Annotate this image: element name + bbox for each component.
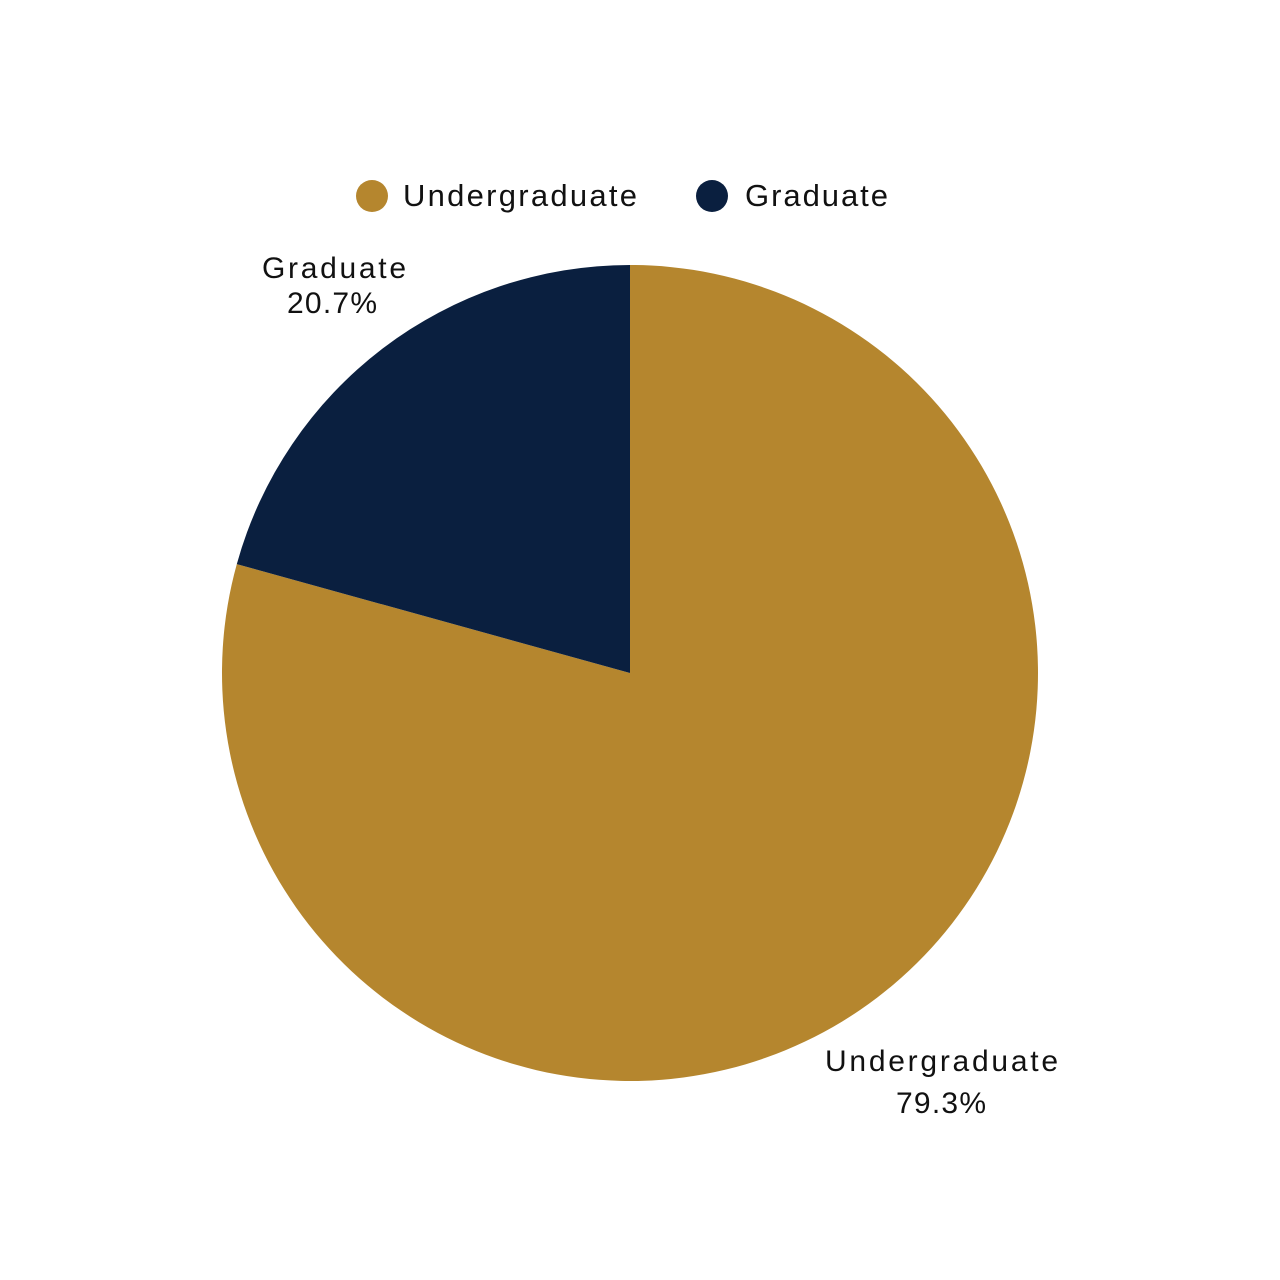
slice: Undergraduate 79.3% [222, 265, 1038, 1081]
slice: Graduate 20.7% [237, 265, 630, 673]
label: Graduate: 20.7% [287, 287, 377, 320]
label: Undergraduate [825, 1045, 1058, 1120]
legend item: Graduate: Graduate [745, 178, 888, 213]
label: Undergraduate: 79.3% [896, 1087, 986, 1120]
pie chart [222, 265, 1038, 1081]
legend item: Undergraduate: Undergraduate [403, 178, 637, 213]
label: Graduate: Graduate [262, 252, 406, 285]
label: Graduate [262, 252, 406, 320]
legend [356, 178, 888, 213]
label: Undergraduate: Undergraduate [825, 1045, 1058, 1078]
